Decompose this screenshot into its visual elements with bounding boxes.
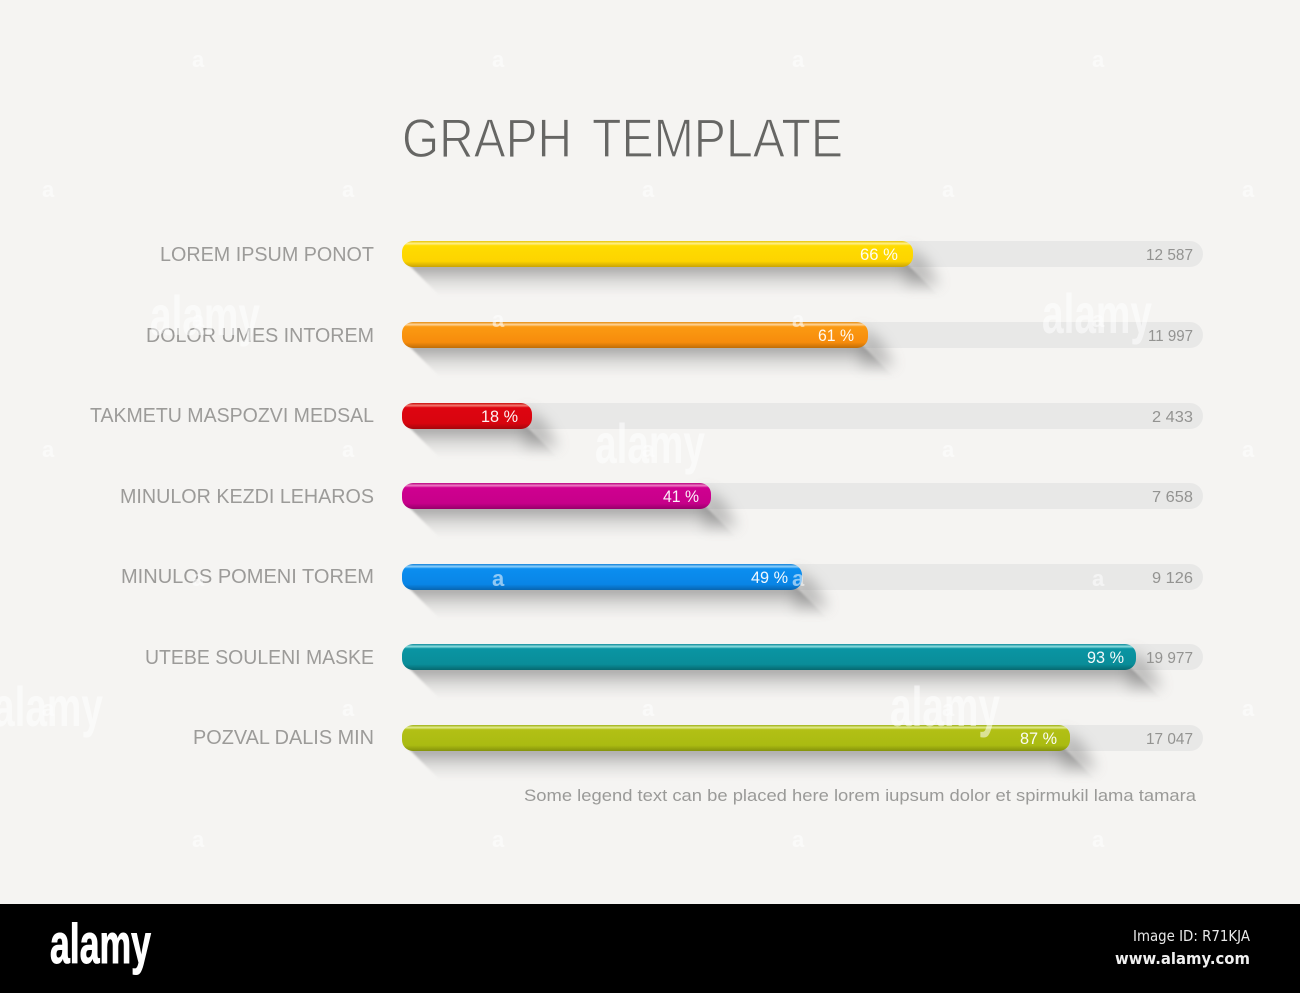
label: LOREM IPSUM PONOT <box>160 244 374 266</box>
watermarks: a <box>192 47 205 72</box>
label: POZVAL DALIS MIN <box>193 727 374 749</box>
label: UTEBE SOULENI MASKE <box>145 647 374 669</box>
watermarks: a <box>42 696 55 721</box>
watermarks: a <box>342 696 355 721</box>
title: GRAPH <box>402 107 572 169</box>
row 1: yellow bar <box>160 241 1203 302</box>
row 7: green bar <box>193 725 1203 786</box>
watermarks: a <box>42 177 55 202</box>
watermarks: a <box>1242 177 1255 202</box>
watermarks <box>0 47 1255 852</box>
watermarks: a <box>42 437 55 462</box>
watermarks: a <box>192 566 205 591</box>
percent: 66 % <box>860 246 898 264</box>
footer logo: alamy <box>50 912 151 975</box>
watermarks: alamy <box>150 284 260 347</box>
value: 7 658 <box>1152 489 1193 506</box>
title: TEMPLATE <box>592 107 843 169</box>
row 4: magenta bar <box>120 483 1203 544</box>
percent: 93 % <box>1087 649 1124 667</box>
watermarks: a <box>942 696 955 721</box>
watermarks: a <box>492 47 505 72</box>
label: DOLOR UMES INTOREM <box>146 325 374 347</box>
watermarks: a <box>1092 47 1105 72</box>
watermarks: a <box>1092 566 1105 591</box>
percent: 41 % <box>663 488 699 506</box>
watermarks: a <box>642 696 655 721</box>
title <box>402 107 843 169</box>
watermarks: a <box>942 177 955 202</box>
watermarks: a <box>642 437 655 462</box>
watermarks: a <box>492 307 505 332</box>
watermarks: a <box>1092 827 1105 852</box>
row 5: blue bar <box>121 564 1203 625</box>
value: 9 126 <box>1152 570 1193 587</box>
watermarks: a <box>792 307 805 332</box>
watermarks: a <box>792 566 805 591</box>
footer band <box>0 904 1300 993</box>
watermarks: a <box>642 177 655 202</box>
watermarks: a <box>1242 437 1255 462</box>
value: 12 587 <box>1146 247 1193 264</box>
watermarks: a <box>342 177 355 202</box>
watermarks: a <box>942 437 955 462</box>
image id: Image ID: R71KJA <box>1133 927 1251 945</box>
row 2: orange bar <box>146 322 1203 383</box>
watermarks: alamy <box>1042 282 1152 345</box>
legend text: Some legend text can be placed here lorem iupsum dolor et spirmukil lama tamara <box>524 786 1197 805</box>
watermarks: a <box>192 827 205 852</box>
label: MINULOS POMENI TOREM <box>121 566 374 588</box>
label: TAKMETU MASPOZVI MEDSAL <box>90 405 374 427</box>
row 6: teal bar <box>145 644 1203 705</box>
watermarks: a <box>792 827 805 852</box>
watermarks: a <box>192 307 205 332</box>
watermarks: a <box>1242 696 1255 721</box>
watermarks: alamy <box>595 412 705 475</box>
watermarks: a <box>492 827 505 852</box>
watermarks: a <box>342 437 355 462</box>
percent: 87 % <box>1020 730 1057 748</box>
watermarks: a <box>492 566 505 591</box>
row 3: red bar <box>90 403 1203 464</box>
watermarks: a <box>792 47 805 72</box>
label: MINULOR KEZDI LEHAROS <box>120 486 374 508</box>
website: www.alamy.com <box>1115 949 1250 968</box>
percent: 61 % <box>818 327 854 345</box>
value: 2 433 <box>1152 409 1193 426</box>
watermarks: alamy <box>890 675 1000 738</box>
percent: 49 % <box>751 569 788 587</box>
percent: 18 % <box>481 408 518 426</box>
value: 19 977 <box>1146 650 1193 667</box>
value: 17 047 <box>1146 731 1193 748</box>
watermarks: a <box>1092 307 1105 332</box>
value: 11 997 <box>1148 328 1193 345</box>
